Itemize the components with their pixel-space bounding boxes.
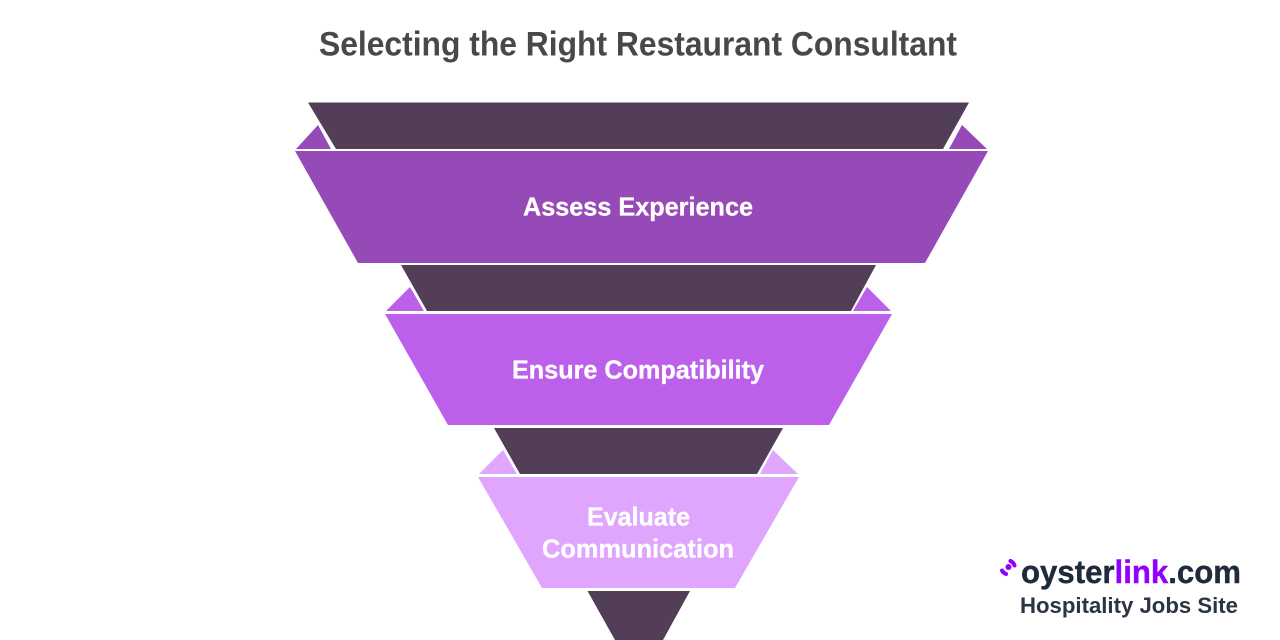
- wordmark: oysterlink.com: [1021, 554, 1241, 590]
- label 3 line 1: Evaluate: [587, 502, 690, 532]
- band 3: [478, 477, 799, 588]
- right fold triangle 2: [853, 287, 891, 311]
- label 2: Ensure Compatibility: [512, 354, 765, 384]
- left fold triangle 2: [386, 287, 424, 311]
- right fold triangle 1: [949, 125, 987, 149]
- title: Selecting the Right Restaurant Consultant: [319, 26, 957, 64]
- left fold triangle 3: [479, 450, 517, 474]
- label 1: Assess Experience: [523, 192, 753, 222]
- funnel stage 3: Evaluate Communication: [478, 428, 799, 588]
- funnel: [295, 102, 988, 640]
- band 2: [385, 314, 892, 425]
- dark connector 3: [494, 428, 783, 474]
- funnel stage 2: Ensure Compatibility: [385, 265, 892, 425]
- dark connector 1: [308, 102, 969, 149]
- logo: [1002, 554, 1241, 618]
- icon: oyster signal: [1002, 561, 1014, 574]
- tagline: Hospitality Jobs Site: [1020, 593, 1238, 618]
- funnel stage 1: Assess Experience: [295, 102, 988, 263]
- label 3 line 2: Communication: [542, 534, 734, 564]
- band 1: [295, 151, 988, 263]
- funnel tip: [588, 591, 690, 640]
- left fold triangle 1: [296, 125, 331, 149]
- right fold triangle 3: [760, 450, 798, 474]
- dark connector 2: [401, 265, 876, 311]
